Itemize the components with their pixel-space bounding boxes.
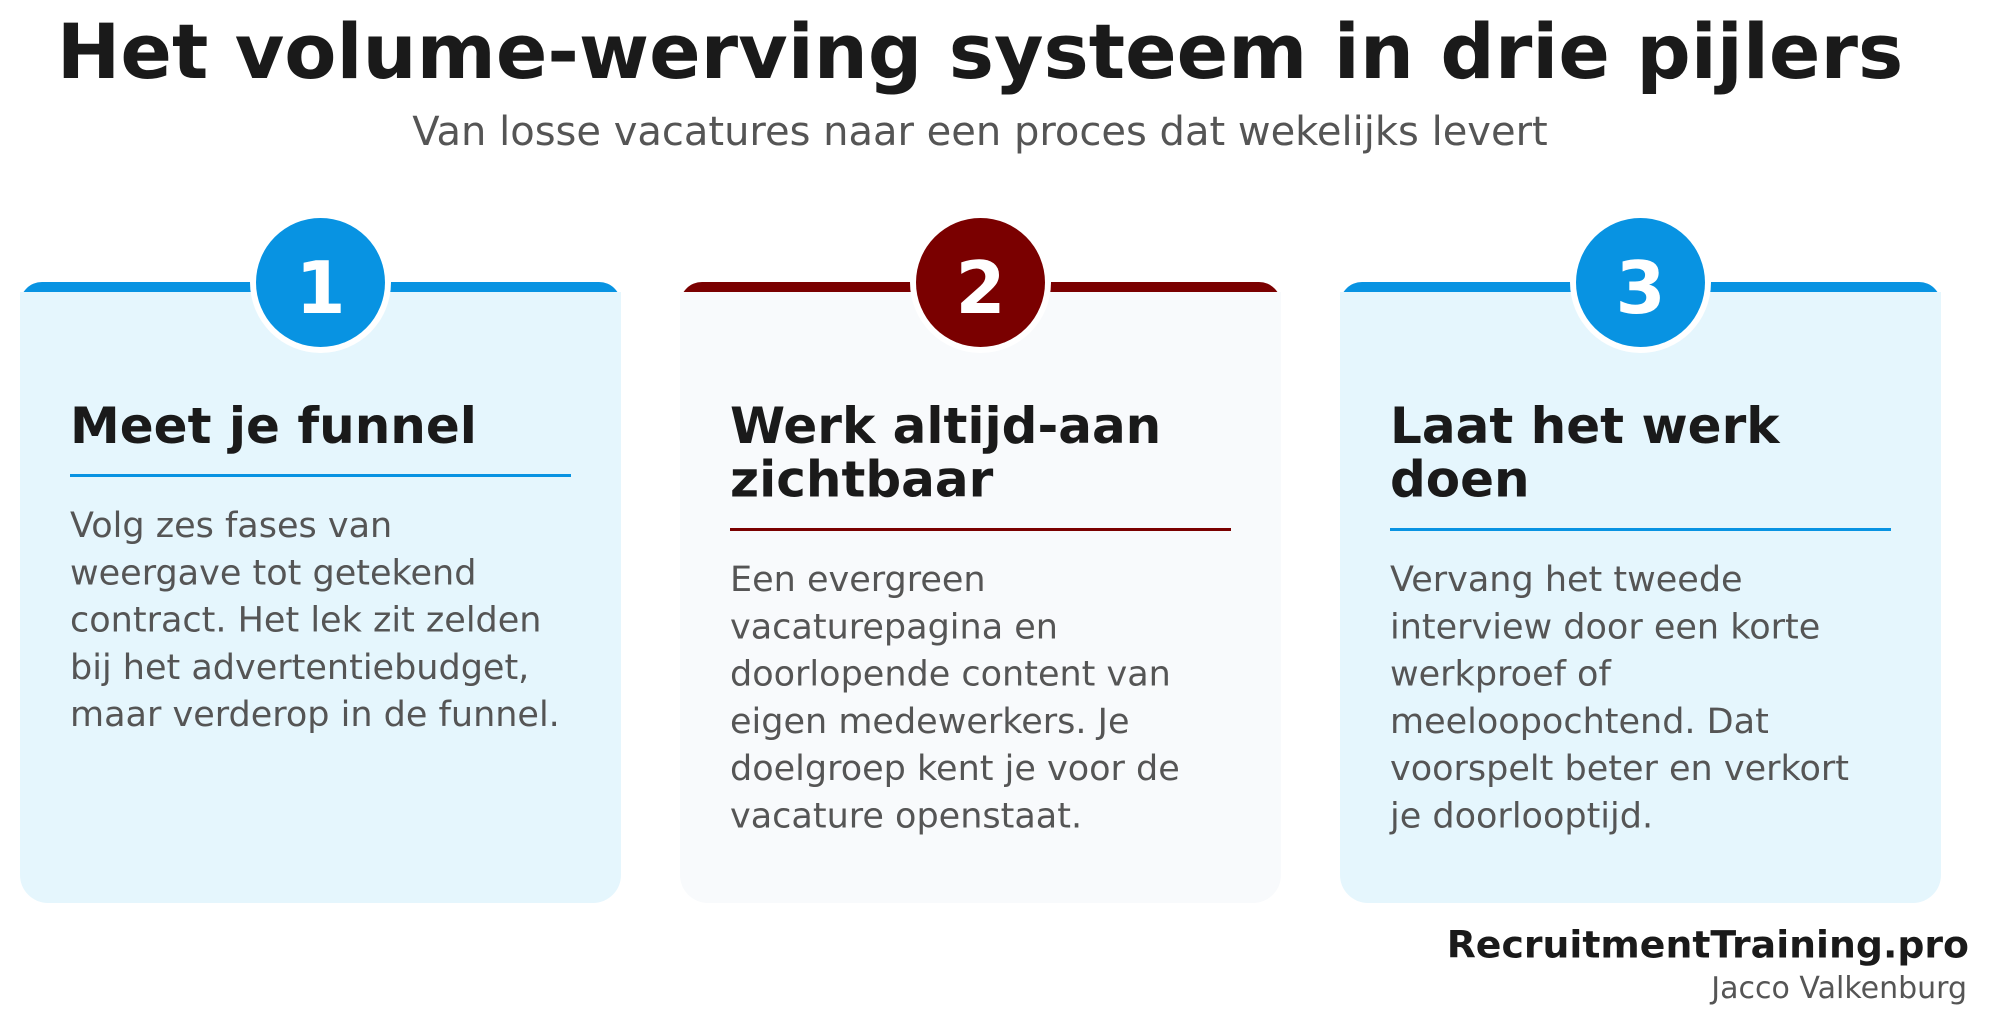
body text 2: eigen medewerkers. Je: [730, 702, 1130, 742]
heading: Meet je funnel: Meet je funnel: [70, 397, 477, 455]
body text 2: vacature openstaat.: [730, 796, 1082, 836]
heading: Laat het werk doen: doen: [1390, 450, 1530, 508]
heading: Werk altijd-aan zichtbaar: Werk altijd-aan: [730, 397, 1161, 455]
body text 2: doorlopende content van: [730, 654, 1171, 694]
body text 1: [70, 506, 560, 735]
heading: Werk altijd-aan zichtbaar: [730, 397, 1161, 508]
body text 2: Een evergreen: [730, 560, 986, 600]
body text 2: doelgroep kent je voor de: [730, 749, 1180, 789]
body text 3: voorspelt beter en verkort: [1390, 749, 1849, 789]
footer author: Jacco Valkenburg: [1709, 971, 1967, 1006]
badge: 1: 1: [295, 246, 346, 330]
body text 3: interview door een korte: [1390, 607, 1820, 647]
heading: Laat het werk doen: Laat het werk: [1390, 397, 1781, 455]
body text 3: Vervang het tweede: [1390, 560, 1743, 600]
body text 1: Volg zes fases van: [70, 506, 392, 546]
footer brand: RecruitmentTraining.pro: [1447, 922, 1969, 966]
badge: 3: 3: [1615, 246, 1666, 330]
badge: 3: [1576, 218, 1705, 347]
body text 1: weergave tot getekend: [70, 553, 476, 593]
body text 2: [730, 560, 1180, 836]
badge: 2: 2: [955, 246, 1006, 330]
body text 1: bij het advertentiebudget,: [70, 648, 529, 688]
panel: pijler 1: [20, 212, 621, 903]
body text 1: maar verderop in de funnel.: [70, 695, 560, 735]
subtitle: Van losse vacatures naar een proces dat wekelijks levert: [412, 109, 1548, 155]
title: Het volume-werving systeem in drie pijlers: [57, 7, 1903, 96]
body text 3: [1389, 560, 1849, 836]
body text 2: vacaturepagina en: [730, 607, 1058, 647]
heading: Werk altijd-aan zichtbaar: zichtbaar: [730, 450, 994, 508]
heading: Laat het werk doen: [1390, 397, 1781, 508]
panel: pijler 3: [1340, 212, 1941, 903]
badge: 1: [256, 218, 385, 347]
badge: 2: [916, 218, 1045, 347]
body text 3: werkproef of: [1390, 654, 1611, 694]
body text 3: meeloopochtend. Dat: [1390, 702, 1769, 742]
body text 3: je doorlooptijd.: [1389, 796, 1653, 836]
panel: pijler 2: [684, 218, 1278, 834]
body text 1: contract. Het lek zit zelden: [70, 600, 541, 640]
